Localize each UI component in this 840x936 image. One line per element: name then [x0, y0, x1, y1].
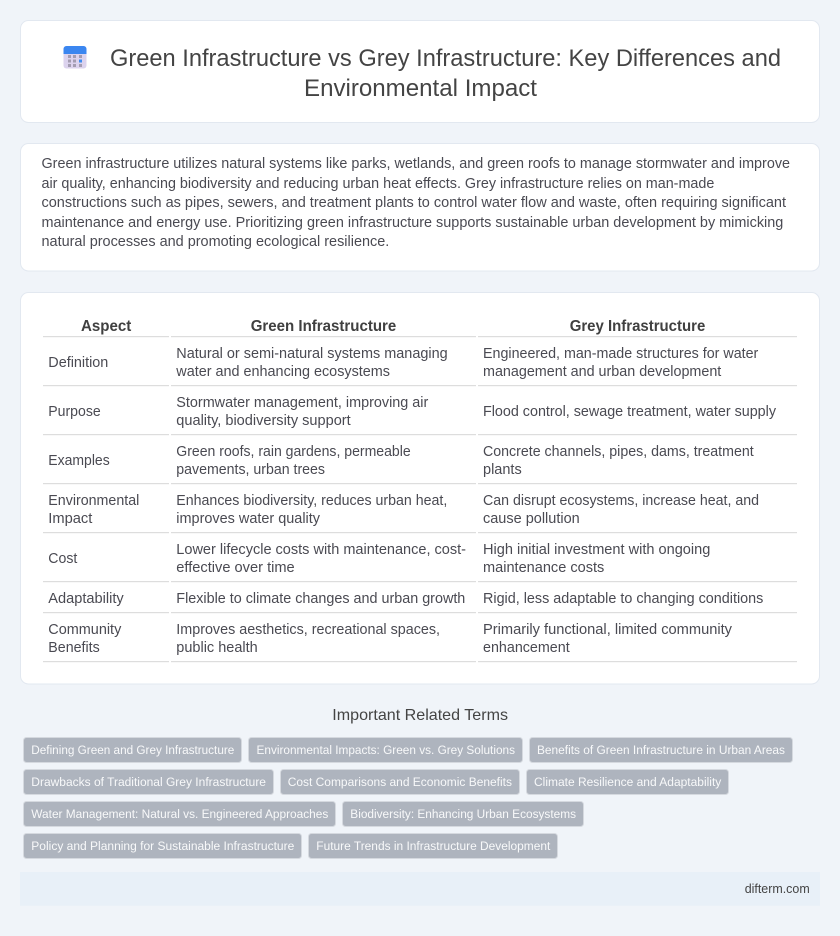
text block: summary: natural processes and promoting ecological resilience.: [42, 234, 389, 250]
title: Environmental Impact: [304, 75, 537, 102]
table header row: Grey Infrastructure: [570, 318, 705, 335]
related term tags: Defining Green and Grey Infrastructure: [31, 743, 235, 757]
row: examples: Concrete channels, pipes, dams, treatment: [483, 444, 754, 460]
row: environmental impact: improves water quality: [176, 511, 321, 527]
table header row: Aspect: [81, 318, 132, 335]
row: community benefits: Improves aesthetics, recreational spaces,: [176, 622, 440, 638]
panel: comparison table: [20, 292, 820, 684]
text block: summary: Green infrastructure utilizes natural systems like parks, wetlands, and green roofs to manage stormwater and improve: [42, 156, 790, 172]
row: definition: Definition: [48, 355, 108, 371]
row: cost: effective over time: [176, 560, 295, 576]
row: environmental impact: cause pollution: [483, 511, 580, 527]
table header row: [81, 318, 705, 335]
row: purpose: [48, 395, 777, 429]
row: environmental impact: Enhances biodiversity, reduces urban heat,: [176, 493, 447, 509]
text block: summary: [42, 156, 790, 250]
related term tags: Drawbacks of Traditional Grey Infrastructure: [31, 775, 266, 789]
panel: title header: [20, 20, 820, 122]
text block: summary: maintenance and energy use. Prioritizing green infrastructure supports sustainable urban development by mimicking: [42, 215, 783, 231]
related term tags: Environmental Impacts: Green vs. Grey Solutions: [256, 743, 515, 757]
row: definition: Engineered, man-made structures for water: [483, 346, 759, 362]
row: adaptability: Flexible to climate changes and urban growth: [176, 591, 465, 607]
related term tags: Biodiversity: Enhancing Urban Ecosystems: [350, 807, 576, 821]
related term tags: Water Management: Natural vs. Engineered Approaches: [31, 807, 328, 821]
row: cost: High initial investment with ongoing: [483, 542, 710, 558]
row: examples: Examples: [48, 453, 110, 469]
related term tags: Climate Resilience and Adaptability: [534, 775, 722, 789]
row: community benefits: Community: [48, 622, 122, 638]
row: definition: [48, 346, 759, 380]
footer credit: difterm.com: [745, 881, 810, 896]
row: purpose: Flood control, sewage treatment, water supply: [483, 404, 777, 420]
row: examples: plants: [483, 462, 522, 478]
row: definition: water and enhancing ecosystems: [175, 364, 390, 380]
row: purpose: quality, biodiversity support: [176, 413, 351, 429]
related term tags: [24, 738, 792, 858]
row: community benefits: Benefits: [48, 640, 100, 656]
text block: summary: air quality, enhancing biodiversity and reducing urban heat effects. Grey infrastructure relies on man-made: [42, 176, 714, 192]
row: purpose: Stormwater management, improving air: [176, 395, 429, 411]
row: cost: Cost: [48, 551, 77, 567]
row: community benefits: public health: [176, 640, 258, 656]
title: [110, 45, 781, 102]
row: community benefits: Primarily functional, limited community: [483, 622, 733, 638]
row: adaptability: Rigid, less adaptable to changing conditions: [483, 591, 763, 607]
row: cost: maintenance costs: [483, 560, 604, 576]
row: purpose: Purpose: [48, 404, 101, 420]
row: cost: [48, 542, 710, 576]
related term tags: Policy and Planning for Sustainable Infrastructure: [31, 839, 295, 853]
row: examples: [48, 444, 754, 478]
heading: important related terms: Important Related Terms: [332, 707, 508, 724]
related term tags: Cost Comparisons and Economic Benefits: [288, 775, 512, 789]
title: Green Infrastructure vs Grey Infrastructure: Key Differences and: [110, 45, 781, 72]
text block: summary: constructions such as pipes, sewers, and treatment plants to control water flow and waste, often requiring significant: [42, 195, 786, 211]
footer: [20, 872, 820, 906]
row: environmental impact: Impact: [48, 511, 92, 527]
related term tags: Benefits of Green Infrastructure in Urban Areas: [537, 743, 785, 757]
row: definition: Natural or semi-natural systems managing: [176, 346, 448, 362]
row: environmental impact: Can disrupt ecosystems, increase heat, and: [483, 493, 759, 509]
row: environmental impact: Environmental: [48, 493, 139, 509]
row: cost: Lower lifecycle costs with maintenance, cost-: [176, 542, 466, 558]
related term tags: Future Trends in Infrastructure Development: [316, 839, 551, 853]
panel: summary paragraph: [20, 144, 820, 271]
icon: calendar grid: [64, 46, 86, 68]
row: adaptability: Adaptability: [48, 591, 125, 607]
row: definition: management and urban development: [483, 364, 721, 380]
row: community benefits: [48, 622, 733, 656]
row: environmental impact: [48, 493, 759, 527]
table header row: Green Infrastructure: [251, 318, 396, 335]
row: examples: Green roofs, rain gardens, permeable: [176, 444, 411, 460]
row: examples: pavements, urban trees: [176, 462, 325, 478]
row: community benefits: enhancement: [483, 640, 570, 656]
row: adaptability: [48, 591, 763, 607]
